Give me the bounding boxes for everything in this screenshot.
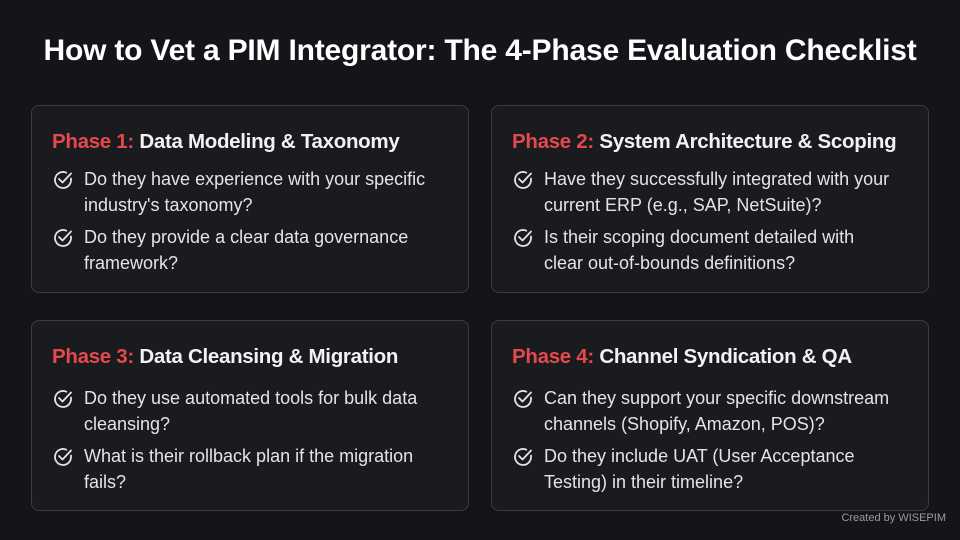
item 1: Have they successfully integrated with your [544,169,889,189]
item 2: clear out-of-bounds definitions? [544,253,795,273]
item 1 [54,388,418,434]
item 1 [54,169,425,215]
item 2: fails? [84,472,126,492]
item 1: Can they support your specific downstream [544,388,889,408]
item 1: Do they use automated tools for bulk data [84,388,417,408]
item 2: Do they include UAT (User Acceptance [544,446,854,466]
item 2 [54,227,408,273]
item 1: current ERP (e.g., SAP, NetSuite)? [544,195,821,215]
panel: phase 4 [491,320,929,511]
heading: phase 2: Phase 2: System Architecture & Scoping [512,130,896,153]
item 1: Do they have experience with your specific [84,169,425,189]
item 2: Do they provide a clear data governance [84,227,408,247]
panel: phase 2 [491,105,929,293]
title: How to Vet a PIM Integrator: The 4-Phase Evaluation Checklist [44,34,916,67]
heading: phase 1: Phase 1: Data Modeling & Taxonomy [52,130,399,153]
item 2 [514,227,854,273]
item 2 [54,446,413,492]
item 2: framework? [84,253,178,273]
item 2: Testing) in their timeline? [544,472,743,492]
item 2: Is their scoping document detailed with [544,227,854,247]
item 2 [514,446,854,492]
item 1 [514,169,889,215]
panel: phase 1 [31,105,469,293]
panel: phase 3 [31,320,469,511]
item 1 [514,388,889,434]
credit: Created by WISEPIM [841,512,946,524]
heading: phase 3: Phase 3: Data Cleansing & Migration [52,345,398,368]
item 1: cleansing? [84,414,170,434]
item 2: What is their rollback plan if the migration [84,446,413,466]
heading: phase 4: Phase 4: Channel Syndication & QA [512,345,852,368]
item 1: channels (Shopify, Amazon, POS)? [544,414,825,434]
item 1: industry's taxonomy? [84,195,253,215]
